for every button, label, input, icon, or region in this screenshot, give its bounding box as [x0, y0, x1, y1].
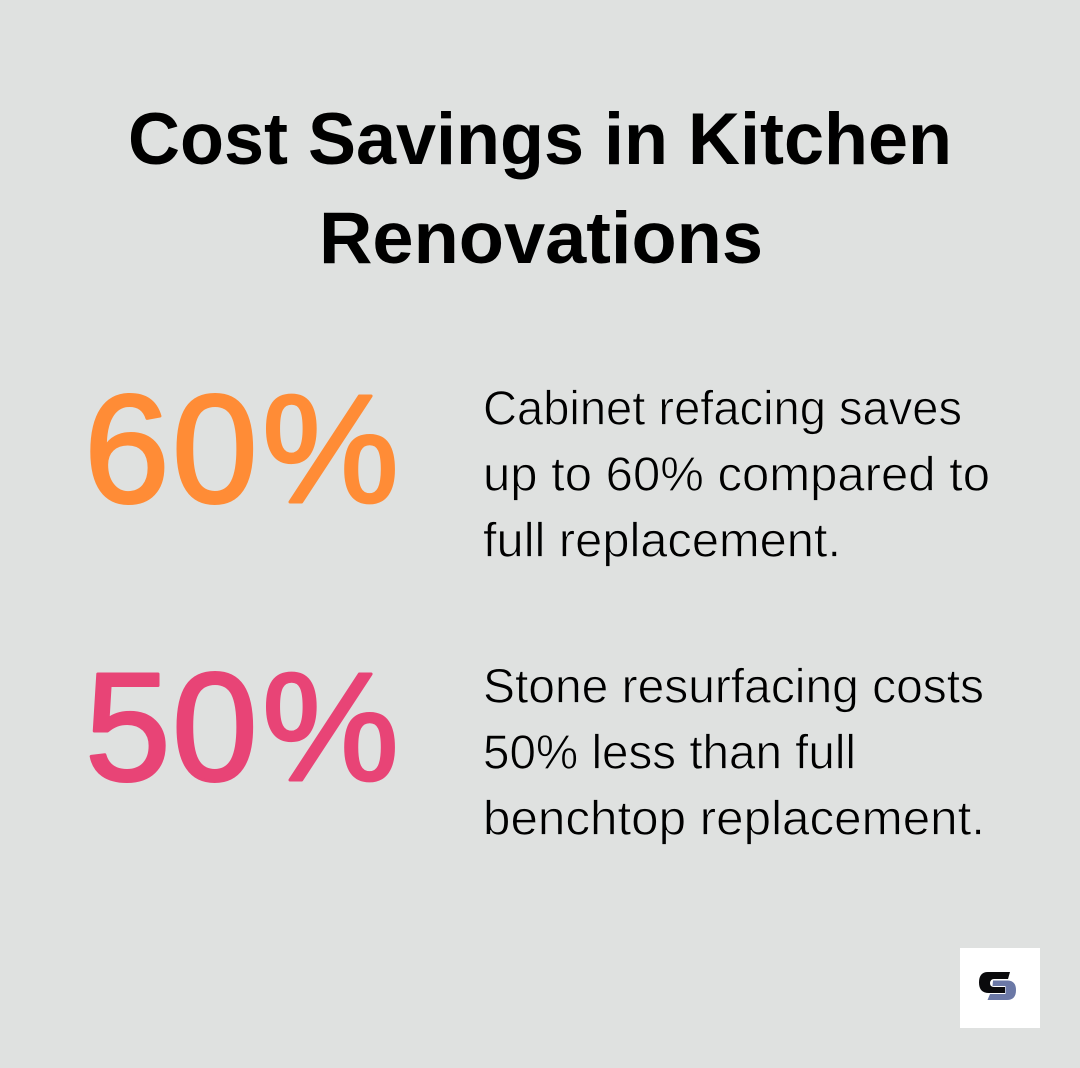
logo mark: black upper stroke: [979, 972, 1010, 993]
description: stone resurfacing: benchtop replacement.: [483, 792, 985, 846]
description: cabinet refacing: full replacement.: [483, 514, 841, 568]
title: [128, 99, 952, 279]
description: cabinet refacing: up to 60% compared to: [483, 448, 990, 502]
stat number: 60%: 60%: [84, 363, 399, 535]
description: stone resurfacing: 50% less than full: [483, 726, 856, 780]
stat row: 50% stone resurfacing: [85, 641, 985, 846]
logo badge: [960, 948, 1040, 1028]
description: cabinet refacing: [483, 382, 990, 568]
title: Cost Savings in Kitchen: [128, 99, 952, 180]
description: stone resurfacing: Stone resurfacing costs: [483, 660, 984, 714]
description: stone resurfacing: [483, 660, 985, 846]
title: Renovations: [319, 198, 763, 279]
description: cabinet refacing: Cabinet refacing saves: [483, 382, 962, 436]
stat number: 50%: 50%: [85, 641, 399, 813]
stat row: 60% cabinet refacing: [84, 363, 990, 568]
logo mark: blue lower stroke: [988, 980, 1016, 1000]
